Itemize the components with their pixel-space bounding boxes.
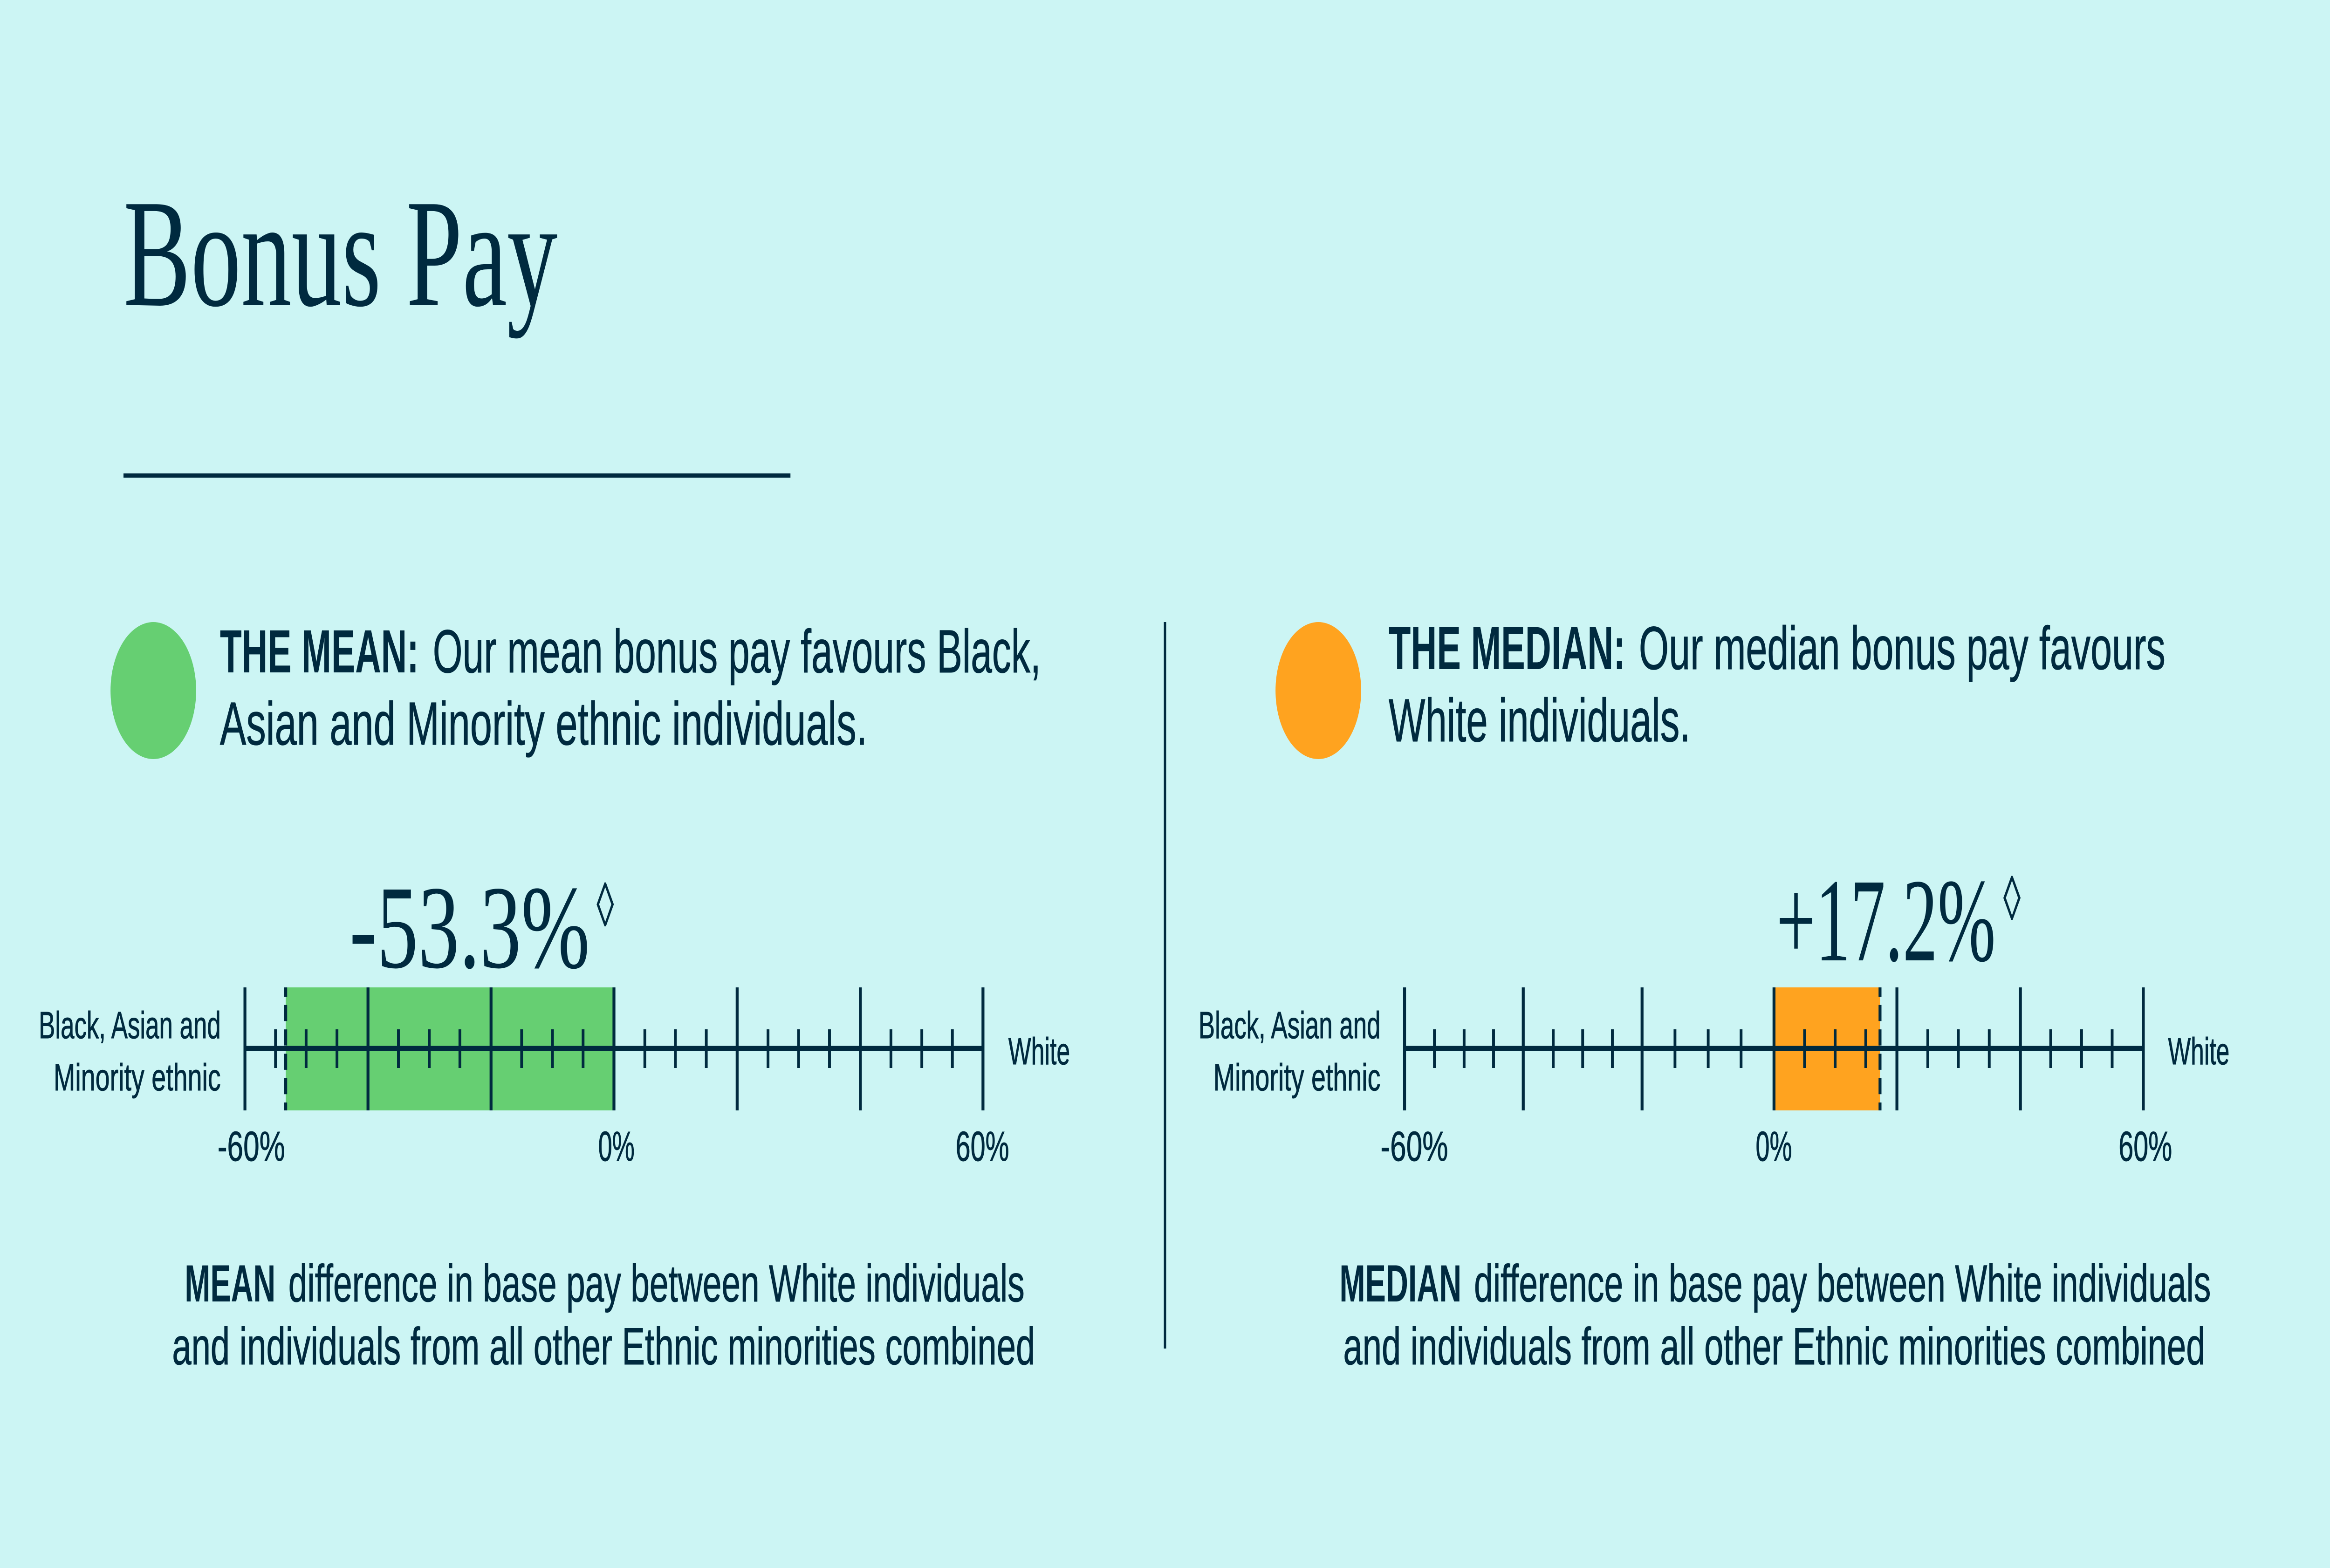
- mean caption: MEAN: [185, 1254, 275, 1313]
- icon: green status circle: [110, 622, 196, 759]
- title: Bonus Pay: [123, 168, 557, 339]
- median value: +17.2%: [1776, 855, 1995, 986]
- mean value: ◊: [596, 871, 614, 940]
- mean scale chart: [39, 987, 1070, 1170]
- mean axis labels: 0%: [598, 1123, 635, 1170]
- median heading text: Our median bonus pay favours: [1639, 614, 2166, 683]
- median caption: [1339, 1254, 2211, 1376]
- median heading text: THE MEDIAN:: [1389, 614, 1625, 683]
- mean heading text: THE MEAN:: [220, 617, 419, 686]
- median scale chart: [1199, 987, 2229, 1170]
- panel: median: [1199, 614, 2229, 1376]
- panel: mean: [39, 617, 1070, 1376]
- mean caption: and individuals from all other Ethnic minorities combined: [172, 1317, 1035, 1376]
- median axis labels: Minority ethnic: [1213, 1056, 1381, 1099]
- mean axis labels: Black, Asian and: [39, 1004, 221, 1047]
- median caption: difference in base pay between White individuals: [1474, 1254, 2211, 1313]
- mean heading text: Asian and Minority ethnic individuals.: [220, 690, 867, 758]
- mean heading text: Our mean bonus pay favours Black,: [433, 617, 1041, 686]
- median axis labels: 60%: [2118, 1123, 2172, 1170]
- median axis labels: -60%: [1380, 1123, 1448, 1170]
- mean highlighted range bar: [286, 987, 614, 1110]
- median axis labels: Black, Asian and: [1199, 1004, 1380, 1047]
- median value: ◊: [2003, 864, 2021, 934]
- median heading text: [1389, 614, 2166, 755]
- mean axis labels: 60%: [956, 1123, 1009, 1170]
- mean caption: difference in base pay between White individuals: [288, 1254, 1025, 1313]
- mean axis labels: Minority ethnic: [54, 1056, 221, 1099]
- median caption: and individuals from all other Ethnic minorities combined: [1343, 1317, 2205, 1376]
- mean value: -53.3%: [350, 862, 590, 993]
- mean axis labels: -60%: [218, 1123, 285, 1170]
- median axis labels: 0%: [1756, 1123, 1792, 1170]
- median highlighted range bar: [1774, 987, 1880, 1110]
- mean caption: [172, 1254, 1035, 1376]
- median axis labels: White: [2168, 1030, 2229, 1073]
- median caption: MEDIAN: [1339, 1254, 1461, 1313]
- mean axis labels: [39, 1004, 1070, 1170]
- mean heading text: [220, 617, 1041, 758]
- mean axis labels: White: [1008, 1030, 1070, 1073]
- icon: orange status circle: [1275, 622, 1361, 759]
- median heading text: White individuals.: [1389, 686, 1690, 755]
- median axis labels: [1199, 1004, 2229, 1170]
